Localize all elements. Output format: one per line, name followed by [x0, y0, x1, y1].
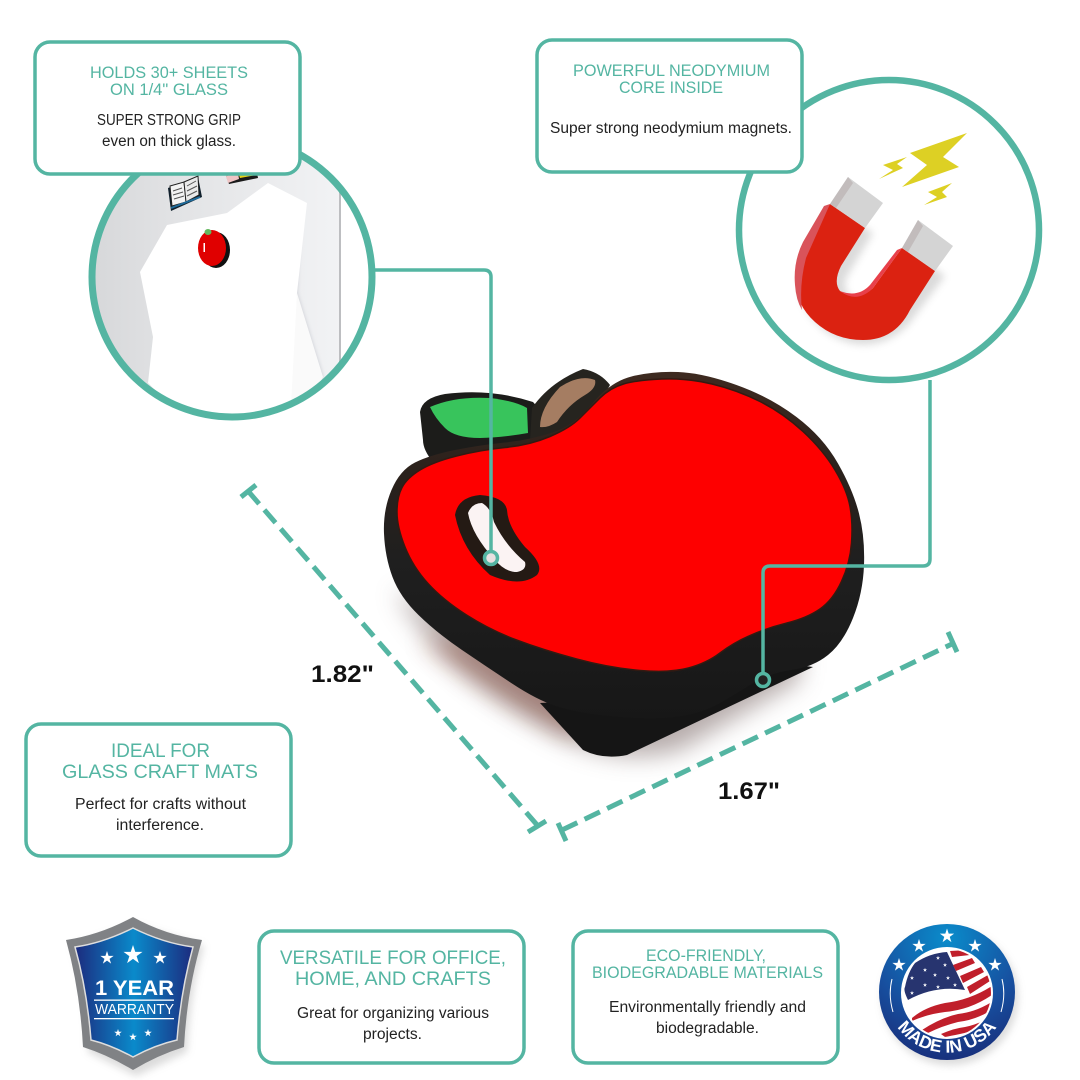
highlight — [455, 495, 539, 582]
leader line: left circle to highlight — [373, 270, 498, 564]
panel: left photo circle — [88, 152, 376, 420]
icon: small apple magnet — [198, 229, 230, 268]
badge: 1 year warranty — [66, 917, 204, 1076]
icon: horseshoe magnet — [795, 177, 953, 345]
badge: 1 year warranty: WARRANTY — [95, 1002, 174, 1018]
callout: versatile: projects. — [363, 1026, 422, 1043]
leaf — [420, 392, 560, 462]
callout: neodymium core: Super strong neodymium magnets. — [550, 120, 792, 137]
icon: notebook magnet — [226, 176, 258, 184]
apple side wall — [384, 372, 864, 718]
icon: lightning bolts — [879, 133, 967, 205]
callout: neodymium core: POWERFUL NEODYMIUM — [573, 62, 770, 80]
apple red face — [397, 379, 852, 671]
callout: versatile — [259, 931, 524, 1063]
callout: neodymium core — [537, 40, 802, 172]
callout: eco-friendly: ECO-FRIENDLY, — [646, 947, 766, 965]
badge: made in USA — [879, 924, 1020, 1068]
callout: holds 30+ sheets — [35, 42, 300, 174]
dimension line: width — [558, 632, 957, 841]
callout: versatile: VERSATILE FOR OFFICE, — [280, 947, 506, 969]
callout: eco-friendly: biodegradable. — [656, 1020, 759, 1037]
product: apple magnet shadow — [395, 590, 800, 756]
flag — [904, 950, 992, 1037]
leader line: right circle to magnet core — [756, 380, 930, 686]
dimension label: 1.67: 1.67" — [718, 778, 780, 805]
callout: glass craft mats: interference. — [116, 817, 204, 834]
stem — [530, 369, 610, 440]
badge: made in USA: MADE IN USA — [898, 1020, 996, 1053]
callout: glass craft mats: Perfect for crafts without — [75, 796, 247, 813]
callout: versatile: Great for organizing various — [297, 1005, 489, 1022]
panel: right magnet circle — [739, 80, 1039, 380]
icon: book magnet — [168, 176, 202, 211]
callout: holds 30+ sheets: HOLDS 30+ SHEETS — [90, 64, 248, 82]
callout: glass craft mats — [26, 724, 291, 856]
dimension line: height — [241, 485, 546, 832]
callout: eco-friendly: Environmentally friendly and — [609, 999, 806, 1016]
callout: versatile: HOME, AND CRAFTS — [295, 968, 491, 990]
callout: holds 30+ sheets: SUPER STRONG GRIP — [97, 112, 241, 129]
callout: holds 30+ sheets: even on thick glass. — [102, 133, 236, 150]
callout: holds 30+ sheets: ON 1/4" GLASS — [110, 81, 228, 99]
callout: glass craft mats: IDEAL FOR — [111, 740, 210, 762]
product: apple magnet — [384, 369, 864, 757]
callout: neodymium core: CORE INSIDE — [619, 79, 723, 97]
callout: eco-friendly: BIODEGRADABLE MATERIALS — [592, 964, 823, 982]
callout: eco-friendly — [573, 931, 838, 1063]
dimension label: 1.82: 1.82" — [311, 661, 374, 688]
badge: 1 year warranty: 1 YEAR — [95, 977, 174, 1000]
callout: glass craft mats: GLASS CRAFT MATS — [62, 761, 258, 783]
magnet base — [540, 660, 813, 757]
